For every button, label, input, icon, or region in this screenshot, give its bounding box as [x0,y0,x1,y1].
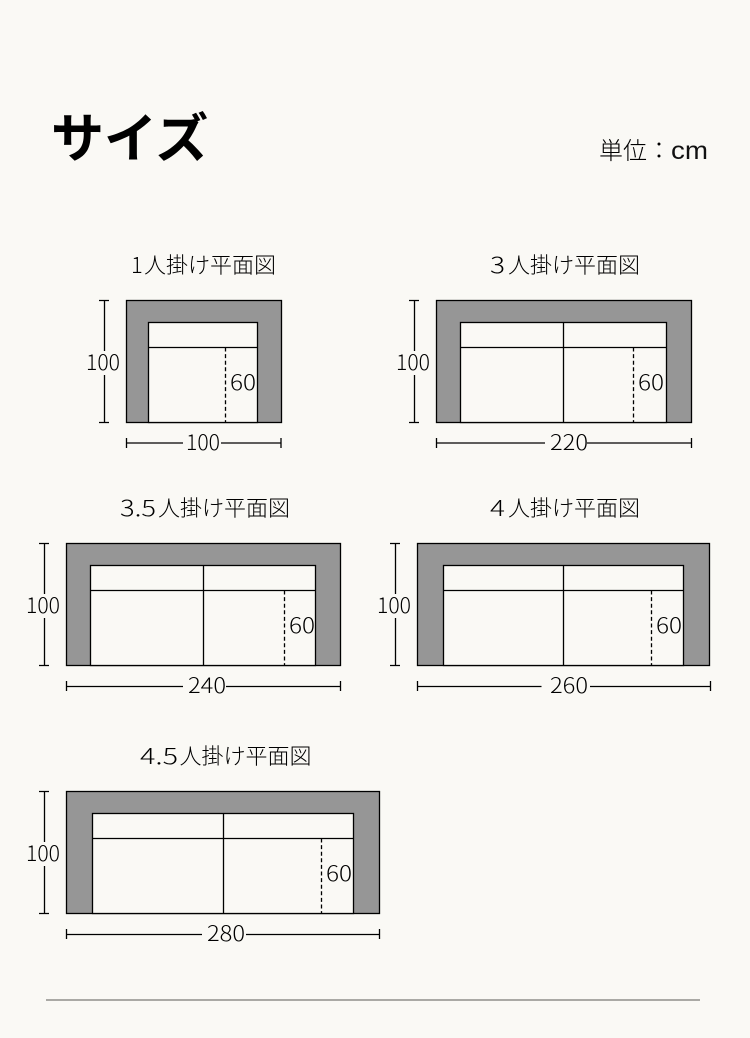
width dimension: 240 [188,670,226,700]
heading: 3.5-seater: 3.5 [120,491,156,523]
heading: 4.5-seater: 人掛け平面図 [180,739,312,771]
height dimension: 100 [396,347,430,377]
panel: 3.5-seater plan [26,491,340,700]
width dimension [418,670,710,700]
height dimension [86,300,120,422]
height dimension [26,792,60,914]
heading: 4-seater: 4 [490,491,505,523]
height dimension: 100 [26,590,60,620]
panel: 4-seater plan [377,491,710,700]
sofa plan: 1-seater [126,300,282,422]
width dimension: 100 [186,427,220,457]
depth label 60: 60 [656,610,682,640]
width dimension [66,918,380,948]
width dimension [126,427,281,457]
height dimension [377,544,411,666]
panel: 1-seater plan [86,248,282,457]
heading: 3-seater: 人掛け平面図 [508,248,640,280]
unit label: 単位： [599,131,671,166]
sofa plan: 3-seater [436,300,692,422]
height dimension: 100 [86,347,120,377]
height dimension: 100 [377,590,411,620]
width dimension: 260 [550,670,588,700]
width dimension [66,670,340,700]
heading: 3.5-seater: 人掛け平面図 [158,491,290,523]
depth label 60: 60 [230,367,256,397]
depth label 60: 60 [638,367,664,397]
heading: 3-seater: 3 [490,248,505,280]
height dimension [26,544,60,666]
depth label 60: 60 [289,610,315,640]
heading: 1-seater: 1 [131,248,143,280]
panel: 3-seater plan [396,248,692,457]
width dimension [436,427,692,457]
heading: 1-seater: 人掛け平面図 [144,248,276,280]
sofa plan: 4.5-seater [66,792,380,914]
depth label 60: 60 [326,858,352,888]
width dimension: 280 [207,918,245,948]
heading: 4-seater: 人掛け平面図 [508,491,640,523]
height dimension: 100 [26,838,60,868]
unit label [599,131,708,166]
width dimension: 220 [550,427,588,457]
unit label: cm [671,137,708,165]
title: サイズ [51,97,208,173]
sofa plan: 3.5-seater [66,544,340,666]
height dimension [396,300,430,422]
sofa plan: 4-seater [418,544,710,666]
panel: 4.5-seater plan [26,739,380,948]
heading: 4.5-seater: 4.5 [140,739,178,771]
